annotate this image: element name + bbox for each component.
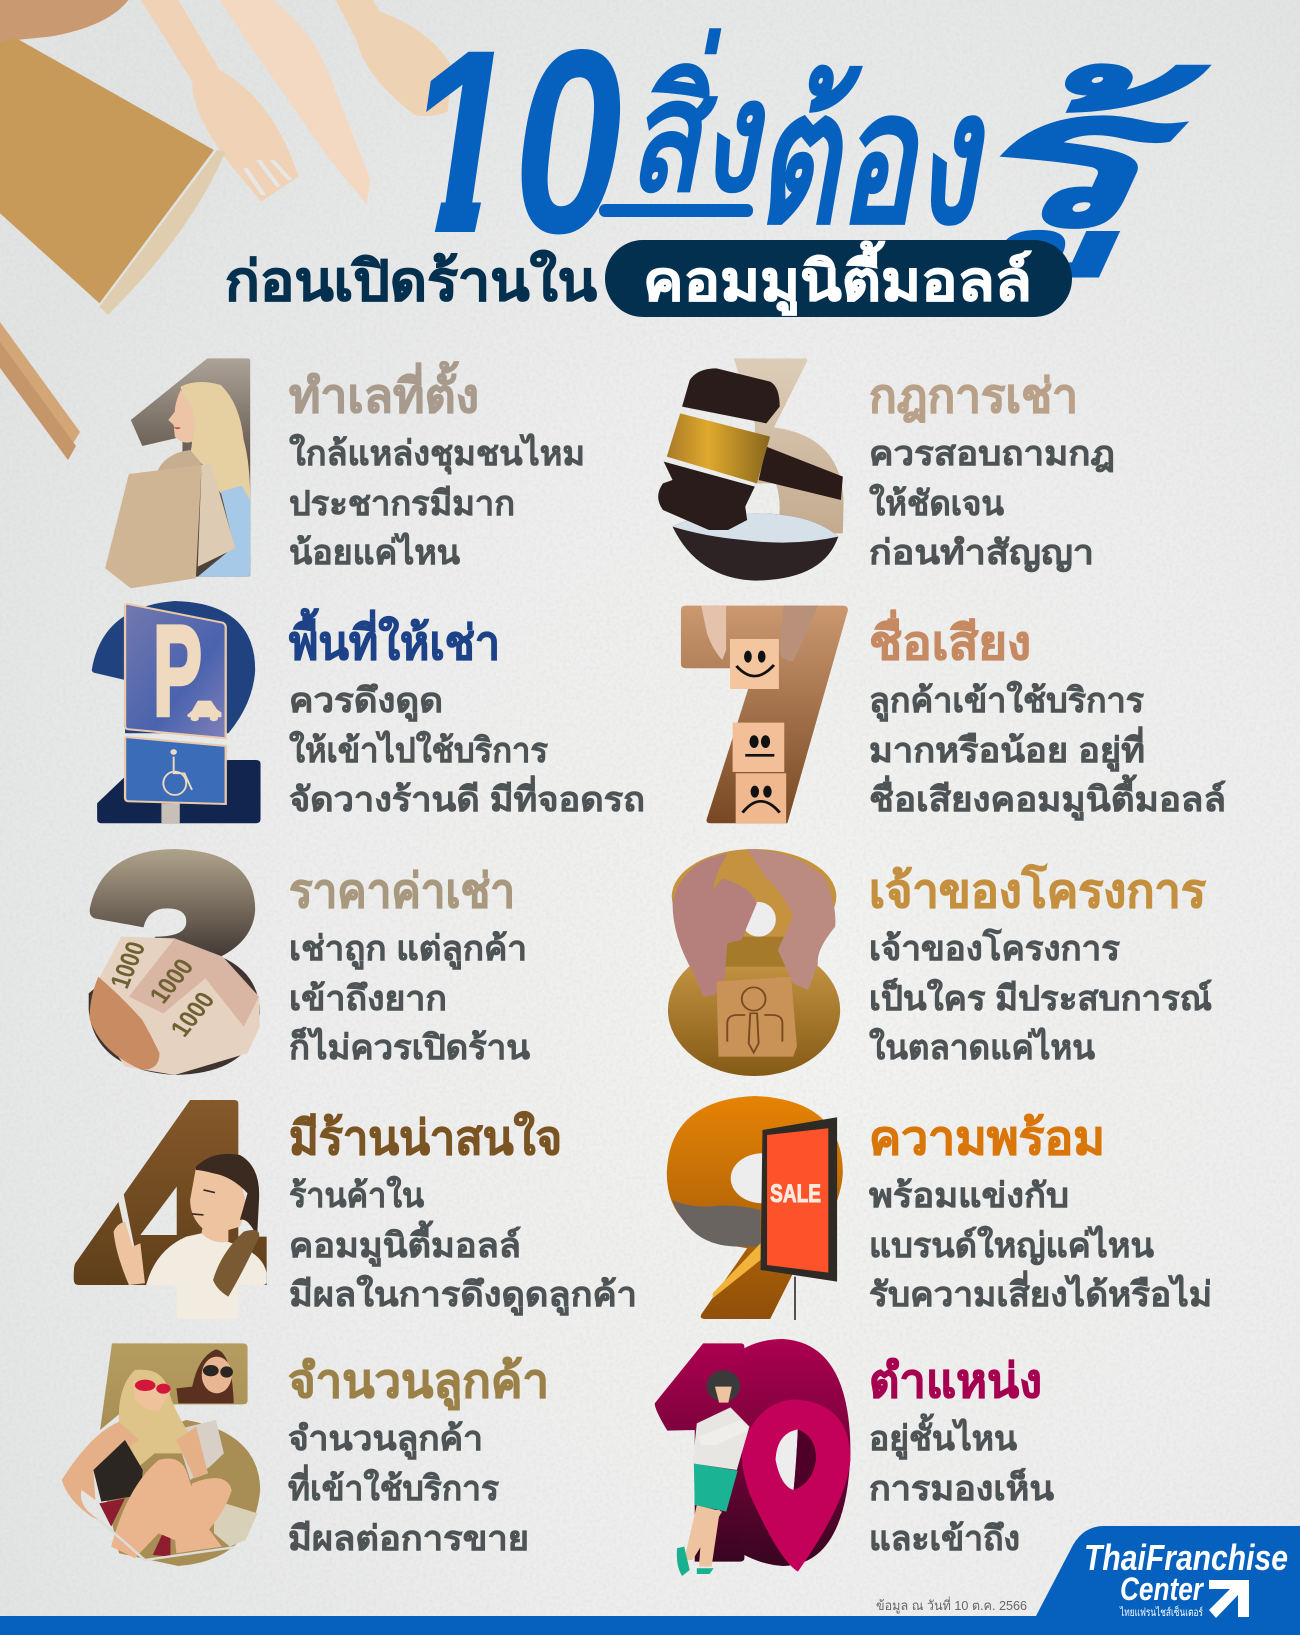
title: 10 สิ่งต้องรู้: 10 — [405, 0, 622, 288]
numeral 6 with gavel — [658, 358, 844, 581]
description: ที่เข้าใช้บริการ — [288, 1464, 500, 1508]
description: เจ้าของโครงการ — [869, 928, 1121, 968]
description: มีผลต่อการขาย — [288, 1520, 529, 1558]
icon: car — [187, 701, 221, 721]
panel: item 3 — [89, 849, 530, 1075]
description: พร้อมแข่งกับ — [869, 1177, 1069, 1215]
description: มีผลในการดึงดูดลูกค้า — [289, 1274, 637, 1316]
panel: item 9 — [667, 1096, 1212, 1320]
panel: item 1 — [105, 358, 585, 588]
description — [289, 433, 585, 572]
illustration: wooden sticks — [0, 322, 80, 460]
numeral 7 with emoji blocks — [681, 606, 848, 823]
numeral 9 with sale sign: SALE — [770, 1179, 821, 1208]
numeral 1 with shopper — [105, 358, 250, 588]
logo: ThaiFranchise Center: ไทยแฟรนไชส์เซ็นเตอร์ — [1119, 1605, 1203, 1619]
numeral 2 with parking sign — [92, 600, 261, 823]
description: ในตลาดแค่ไหน — [869, 1027, 1095, 1067]
panel: item 5 — [62, 1343, 549, 1566]
title: 10 สิ่งต้องรู้: สิ่ง — [628, 28, 767, 223]
description — [869, 928, 1212, 1067]
numeral 2 with parking sign: P — [153, 600, 202, 743]
heading: ราคาค่าเช่า — [289, 864, 515, 917]
description: ลูกค้าเข้าใช้บริการ — [869, 680, 1145, 722]
numeral 5 with women in cart — [62, 1343, 260, 1566]
description: มากหรือน้อย อยู่ที่ — [869, 726, 1145, 772]
title: 10 สิ่งต้องรู้: รู้ — [958, 54, 1213, 278]
description — [869, 680, 1226, 821]
panel: item 8 — [668, 849, 1212, 1076]
illustration: kraft packaging and wooden cutlery — [0, 0, 452, 315]
heading: จำนวนลูกค้า — [288, 1354, 549, 1411]
description — [288, 1420, 529, 1558]
description: ใกล้แหล่งชุมชนไหม — [289, 433, 585, 475]
panel: item 6 — [658, 358, 1115, 581]
heading: ตำแหน่ง — [869, 1354, 1042, 1407]
description — [869, 435, 1115, 573]
panel: item 4 — [74, 1100, 637, 1319]
description: เข้าถึงยาก — [289, 980, 447, 1018]
numeral 3 with banknotes: 1000 — [165, 988, 221, 1042]
icon: arrow — [1209, 1580, 1249, 1618]
description: ชื่อเสียงคอมมูนิตี้มอลล์ — [869, 774, 1226, 821]
source note: ข้อมูล ณ วันที่ 10 ต.ค. 2566 — [876, 1597, 1027, 1614]
description: ให้เข้าไปใช้บริการ — [289, 730, 549, 770]
subtitle: ก่อนเปิดร้านใน — [225, 249, 597, 312]
description: แบรนด์ใหญ่แค่ไหน — [869, 1225, 1154, 1266]
description: เป็นใคร มีประสบการณ์ — [869, 977, 1212, 1018]
description — [289, 1175, 637, 1316]
heading: ทำเลที่ตั้ง — [289, 361, 479, 422]
description: คอมมูนิตี้มอลล์ — [289, 1220, 521, 1267]
subtitle — [225, 240, 1072, 317]
numeral 3 with banknotes: 1000 — [105, 938, 152, 992]
subtitle: คอมมูนิตี้มอลล์ — [643, 241, 1032, 316]
logo: ThaiFranchise Center: Center — [1120, 1571, 1204, 1607]
description: ให้ชัดเจน — [869, 483, 1004, 523]
description: รับความเสี่ยงได้หรือไม่ — [869, 1270, 1212, 1314]
description — [869, 1413, 1054, 1558]
footer bar — [0, 1616, 1300, 1635]
panel: item 2 — [92, 600, 645, 823]
numeral 4 with woman — [74, 1100, 267, 1319]
description: อยู่ชั้นไหน — [869, 1413, 1017, 1460]
heading: เจ้าของโครงการ — [869, 863, 1206, 917]
heading: มีร้านน่าสนใจ — [289, 1110, 562, 1164]
numeral 9 with sale sign — [667, 1096, 843, 1320]
numeral 3 with banknotes: 1000 — [144, 954, 200, 1008]
description: เช่าถูก แต่ลูกค้า — [289, 930, 527, 970]
description — [289, 930, 530, 1067]
numeral 3 with banknotes — [89, 849, 260, 1075]
heading: ความพร้อม — [869, 1111, 1105, 1164]
heading: กฎการเช่า — [869, 369, 1078, 422]
description: ประชากรมีมาก — [289, 485, 515, 523]
description — [289, 682, 645, 819]
icon: wheelchair — [163, 750, 192, 795]
heading: ชื่อเสียง — [869, 609, 1031, 669]
description: ก่อนทำสัญญา — [869, 534, 1094, 573]
numeral 10 with map pin and woman — [655, 1339, 850, 1576]
description: ก็ไม่ควรเปิดร้าน — [289, 1026, 530, 1067]
description: ควรสอบถามกฎ — [869, 435, 1115, 473]
title: 10 สิ่งต้องรู้: ต้อง — [755, 56, 986, 262]
panel: item 7 — [681, 606, 1226, 823]
description: และเข้าถึง — [869, 1520, 1020, 1558]
numeral 8 with hand and block — [668, 849, 840, 1076]
description: จัดวางร้านดี มีที่จอดรถ — [289, 775, 645, 819]
description — [869, 1177, 1212, 1314]
description: น้อยแค่ไหน — [289, 532, 460, 572]
description: ร้านค้าใน — [289, 1175, 424, 1215]
panel: item 10 — [655, 1339, 1054, 1576]
description: ควรดึงดูด — [289, 682, 443, 722]
logo: ThaiFranchise Center — [1036, 1526, 1300, 1619]
title: 10 สิ่งต้องรู้ — [426, 28, 1212, 278]
description: จำนวนลูกค้า — [288, 1420, 483, 1460]
heading: พื้นที่ให้เช่า — [289, 608, 500, 669]
description: การมองเห็น — [869, 1467, 1054, 1508]
